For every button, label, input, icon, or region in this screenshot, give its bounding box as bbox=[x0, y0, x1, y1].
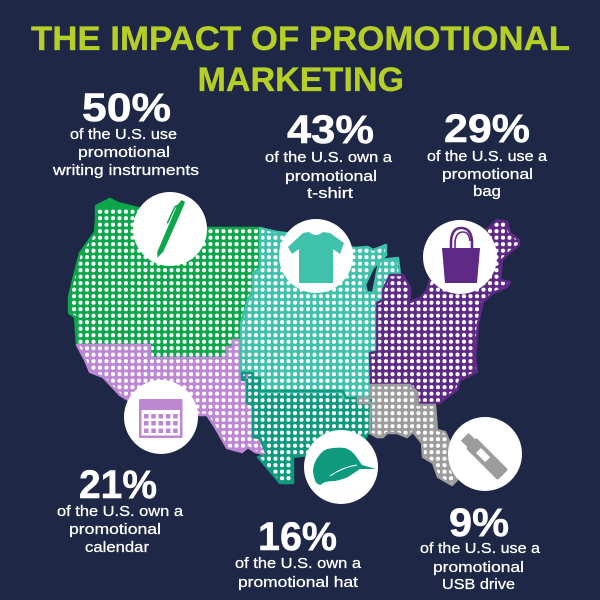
stat: 50% writing instruments bbox=[52, 86, 199, 179]
stat: 29% bag: bag bbox=[473, 184, 501, 200]
stat: 9% USB drive: USB drive bbox=[442, 577, 515, 593]
icon: pen bbox=[133, 192, 207, 266]
stat: 16% hat bbox=[235, 515, 362, 591]
stat: 29% bag: of the U.S. use a bbox=[427, 149, 548, 165]
stat: 43% t-shirt: of the U.S. own a bbox=[265, 150, 393, 166]
white dot grid bbox=[68, 212, 525, 485]
region: northeast, purple bbox=[370, 220, 519, 403]
stat: 9% USB drive bbox=[420, 501, 541, 593]
stat: 29% bag: 29% bbox=[444, 107, 530, 151]
stat: 50% writing instruments: writing instruments bbox=[52, 163, 199, 179]
stat: 50% writing instruments: promotional bbox=[78, 145, 170, 161]
stat: 43% t-shirt: t-shirt bbox=[307, 186, 353, 202]
stat: 21% calendar bbox=[57, 463, 184, 556]
icon: t-shirt bbox=[279, 219, 353, 293]
stat: 43% t-shirt bbox=[265, 108, 393, 202]
region edges bbox=[69, 199, 519, 485]
icon: cap bbox=[304, 430, 378, 504]
stat: 50% writing instruments: 50% bbox=[82, 86, 171, 130]
stat: 29% bag bbox=[427, 107, 548, 200]
region: northwest, green bbox=[69, 199, 260, 358]
icon: USB drive bbox=[448, 417, 522, 491]
region: southeast, grey bbox=[358, 385, 457, 485]
stat: 43% t-shirt: promotional bbox=[285, 169, 377, 185]
region: southwest, pink bbox=[77, 340, 267, 455]
stat: 21% calendar: calendar bbox=[85, 540, 149, 556]
stat: 50% writing instruments: of the U.S. use bbox=[70, 127, 177, 143]
icon: calendar bbox=[124, 380, 198, 454]
title: MARKETING bbox=[198, 61, 404, 99]
stat: 16% hat: 16% bbox=[258, 515, 337, 559]
region: south central, dark teal bbox=[242, 373, 371, 483]
stat: 21% calendar: 21% bbox=[79, 463, 157, 507]
stat: 21% calendar: of the U.S. own a bbox=[57, 504, 184, 520]
stat: 16% hat: of the U.S. own a bbox=[235, 556, 362, 572]
stat: 16% hat: promotional hat bbox=[238, 575, 358, 591]
dotted US map bbox=[68, 199, 525, 485]
title bbox=[31, 20, 570, 99]
stat: 21% calendar: promotional bbox=[69, 522, 161, 538]
stat: 9% USB drive: 9% bbox=[449, 501, 509, 545]
region: midwest, teal bbox=[241, 228, 400, 398]
stat: 29% bag: promotional bbox=[442, 167, 533, 183]
stat: 9% USB drive: of the U.S. use a bbox=[420, 541, 541, 557]
title: THE IMPACT OF PROMOTIONAL bbox=[31, 20, 570, 58]
stat: 9% USB drive: promotional bbox=[433, 560, 524, 576]
icon: tote bag bbox=[423, 220, 497, 294]
stat: 43% t-shirt: 43% bbox=[287, 108, 374, 152]
